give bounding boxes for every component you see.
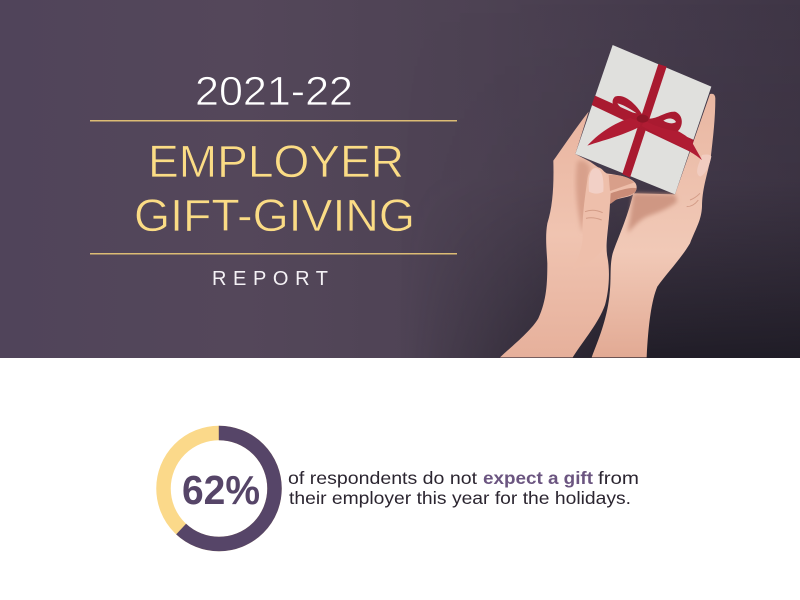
top divider (90, 120, 457, 122)
title (134, 136, 415, 241)
right hand (592, 94, 715, 357)
statistic description: expect a gift (483, 468, 593, 488)
ribbon (587, 64, 702, 178)
statistic description: of respondents do not (288, 468, 477, 488)
statistic description (288, 468, 639, 508)
title: GIFT-GIVING (134, 190, 415, 241)
header background panel (0, 0, 800, 358)
statistic description: from (598, 468, 639, 488)
thumb (572, 167, 609, 270)
left hand (500, 112, 637, 357)
year heading: 2021-22 (195, 68, 353, 114)
subtitle: REPORT (212, 268, 328, 290)
donut chart: 62% (164, 433, 274, 544)
gift box (575, 45, 711, 194)
statistic description: their employer this year for the holidays. (289, 488, 631, 508)
photo: hands holding gift box (500, 45, 715, 357)
bottom divider (90, 253, 457, 254)
donut value: 62% (182, 467, 260, 513)
title: EMPLOYER (148, 136, 404, 187)
